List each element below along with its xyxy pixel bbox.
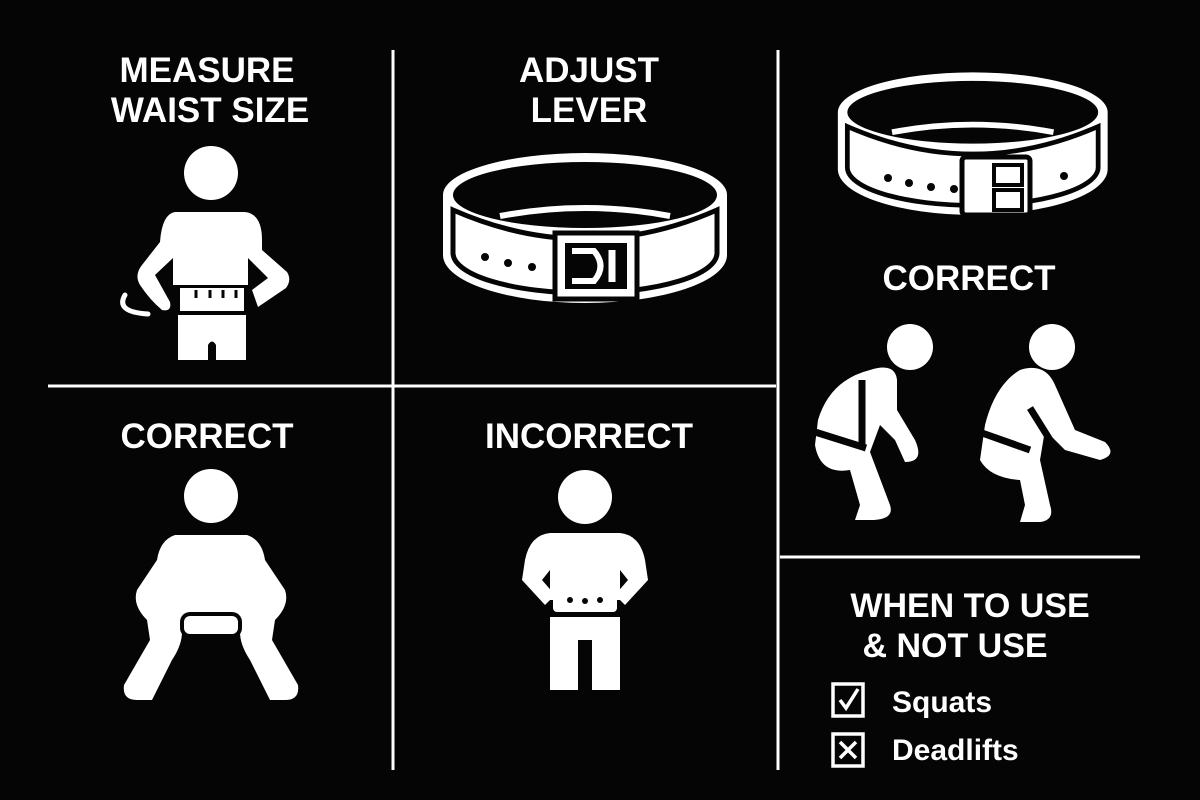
heading: when to use & not use: WHEN TO USE — [850, 587, 1090, 625]
heading: measure waist size: WAIST SIZE — [111, 91, 309, 130]
list: deadlifts crossed: Deadlifts — [892, 734, 1019, 767]
heading: correct (bottom left): CORRECT — [120, 417, 294, 456]
heading: adjust lever: ADJUST — [519, 51, 659, 90]
icon: incorrect belt position figure — [522, 470, 648, 690]
heading: when to use & not use — [850, 587, 1090, 665]
icon: person measuring waist — [123, 146, 289, 360]
heading: measure waist size: MEASURE — [119, 51, 295, 90]
icon: two squatting figures — [815, 324, 1110, 522]
icon: belt with lever buckle — [443, 153, 727, 303]
icon: correct belt position figure — [124, 469, 298, 700]
heading: correct (right): CORRECT — [882, 259, 1056, 298]
list: squats checked — [833, 684, 992, 719]
list: deadlifts crossed — [833, 734, 1019, 767]
icon: belt top right — [838, 72, 1108, 215]
heading: adjust lever — [519, 51, 659, 130]
heading: adjust lever: LEVER — [531, 91, 647, 130]
heading: incorrect: INCORRECT — [485, 417, 693, 456]
heading: when to use & not use: & NOT USE — [862, 627, 1048, 665]
list: squats checked: Squats — [892, 686, 992, 719]
heading: measure waist size — [111, 51, 309, 130]
